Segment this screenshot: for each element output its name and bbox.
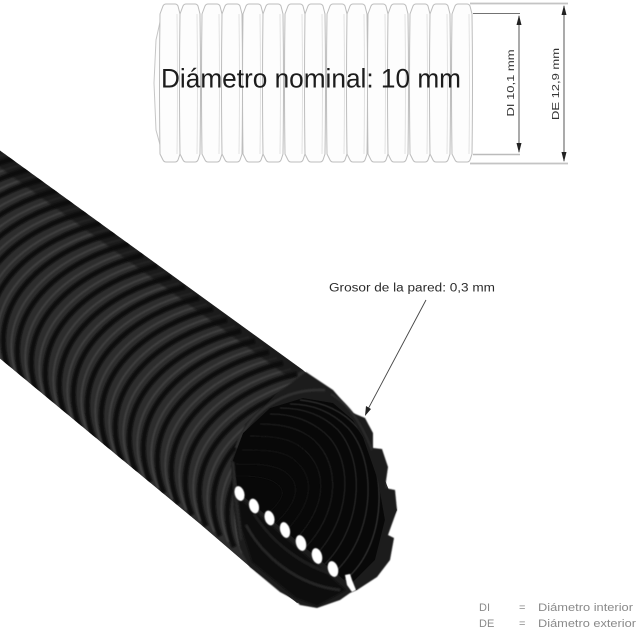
tube left end cap	[154, 5, 172, 161]
legend: abbreviations: Diámetro exterior	[538, 618, 636, 630]
legend: abbreviations	[479, 602, 636, 630]
arrow to tube wall	[365, 300, 426, 416]
callout: wall thickness: Grosor de la pared: 0,3 mm	[329, 282, 495, 294]
dimension: inner diameter: DI 10,1 mm	[505, 49, 517, 116]
legend: abbreviations: DI	[479, 602, 490, 614]
upper edge shading	[0, 149, 303, 378]
legend: abbreviations: Diámetro interior	[538, 602, 633, 614]
legend: abbreviations: =	[519, 618, 525, 630]
dimension: inner diameter	[473, 14, 522, 154]
rim highlights	[236, 390, 372, 450]
technical diagram: corrugated tube outline	[154, 4, 472, 162]
tube body with ribs	[0, 147, 397, 603]
lower interior wall	[233, 462, 346, 606]
black corrugated tube	[0, 147, 397, 608]
legend: abbreviations: DE	[479, 618, 494, 630]
legend: abbreviations: =	[519, 602, 525, 614]
callout: wall thickness	[329, 282, 495, 416]
dimension: outer diameter: DE 12,9 mm	[550, 48, 562, 120]
tube mouth rim with notches	[231, 372, 397, 608]
slit openings	[233, 485, 356, 592]
dimension: outer diameter	[470, 4, 568, 164]
heading: nominal diameter: Diámetro nominal: 10 mm	[161, 64, 461, 94]
tube interior with ridges	[233, 398, 385, 585]
